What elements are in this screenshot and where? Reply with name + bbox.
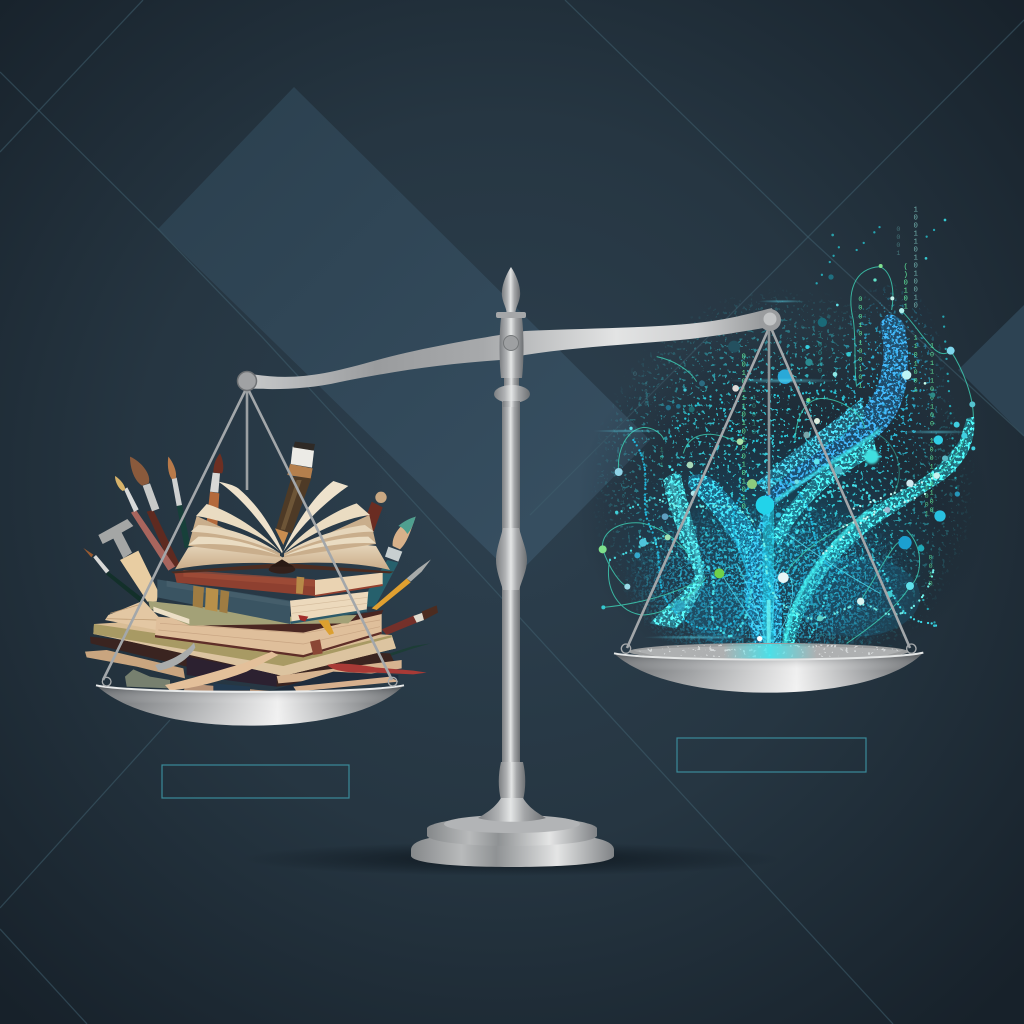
red tipped brush — [205, 453, 223, 537]
flowing data ribbons — [650, 315, 974, 650]
thin dark brush — [363, 643, 431, 665]
right pivot — [759, 309, 781, 331]
finial cap — [496, 312, 526, 318]
right hanging rods — [627, 328, 910, 648]
pink handled brush — [115, 476, 175, 571]
data flame on the right pan — [577, 207, 990, 687]
base lower tier — [411, 833, 614, 867]
fine particle fields — [590, 280, 977, 687]
binary code columns: 101 — [658, 447, 665, 470]
column bulge — [496, 528, 527, 590]
teal brush — [367, 517, 416, 607]
green handled brush — [168, 457, 191, 548]
binary code columns: 0010 — [927, 553, 935, 588]
binary code columns: 1001 — [923, 483, 931, 518]
red book — [174, 572, 315, 596]
light flares — [593, 300, 973, 639]
binary code columns: 10010 — [620, 480, 626, 513]
small red tube — [358, 492, 387, 537]
binary code columns: 0 — [631, 370, 639, 378]
bookmark ribbons — [298, 615, 308, 622]
beam — [243, 308, 776, 389]
left pan load: books and art tools — [83, 442, 438, 692]
left pivot — [238, 372, 256, 390]
binary code columns: 1011100100 — [928, 342, 936, 428]
lower neck — [499, 762, 525, 800]
scattered particles — [610, 220, 957, 637]
binary code columns: 1001101010010 — [912, 207, 920, 311]
paint tube — [275, 442, 315, 545]
binary code columns: 10010 — [816, 332, 824, 375]
shadow under the scale — [241, 842, 781, 876]
binary code columns: 0010111010100101010 — [740, 353, 748, 512]
tan page book — [155, 613, 382, 655]
binary code columns: ()0101 — [902, 263, 910, 311]
binary code columns: 6010 — [643, 382, 649, 408]
balance scale — [96, 267, 923, 867]
binary code columns: 00010100101 — [856, 295, 864, 390]
left hanging rods — [103, 387, 392, 680]
open book — [171, 481, 394, 574]
rivet — [504, 336, 518, 350]
base dome — [478, 798, 546, 822]
binary code columns: 0001 — [894, 225, 902, 257]
empty label box: right — [677, 738, 866, 772]
collar bead — [494, 378, 530, 407]
binary code columns — [620, 207, 936, 588]
teal book — [157, 579, 290, 624]
base top plate — [444, 815, 580, 833]
hammer — [98, 519, 158, 602]
glow behind the data — [610, 420, 943, 673]
column shaft — [502, 400, 520, 770]
bottom loose pages — [85, 650, 185, 678]
loose papers at left — [105, 601, 159, 631]
stacked books — [85, 481, 427, 692]
empty label box: left — [162, 765, 349, 798]
base middle tier — [427, 816, 597, 846]
bottom right scattered books — [277, 660, 402, 683]
left centre rod — [246, 387, 248, 490]
column collar — [500, 318, 524, 378]
carving tools on the pile — [125, 643, 427, 691]
art tools behind the books — [83, 442, 438, 665]
binary code columns: 101001 — [765, 385, 773, 437]
finial — [502, 267, 520, 312]
right pan — [614, 643, 923, 693]
thin left brush — [83, 548, 144, 603]
brown round brush — [130, 457, 180, 568]
binary code columns: 100100100 — [928, 437, 936, 515]
yellow pencil brush — [372, 559, 431, 610]
bottom dark book — [90, 637, 397, 687]
binary code columns: 1101001 — [912, 333, 920, 394]
dark backing behind the data — [577, 327, 990, 687]
dark red brush — [382, 605, 438, 635]
left pan — [96, 677, 404, 726]
large cream book — [93, 620, 396, 676]
nodes — [599, 219, 975, 641]
binary code columns: 10010 — [750, 393, 758, 437]
olive book — [148, 601, 357, 626]
thin orbit lines — [602, 267, 973, 643]
